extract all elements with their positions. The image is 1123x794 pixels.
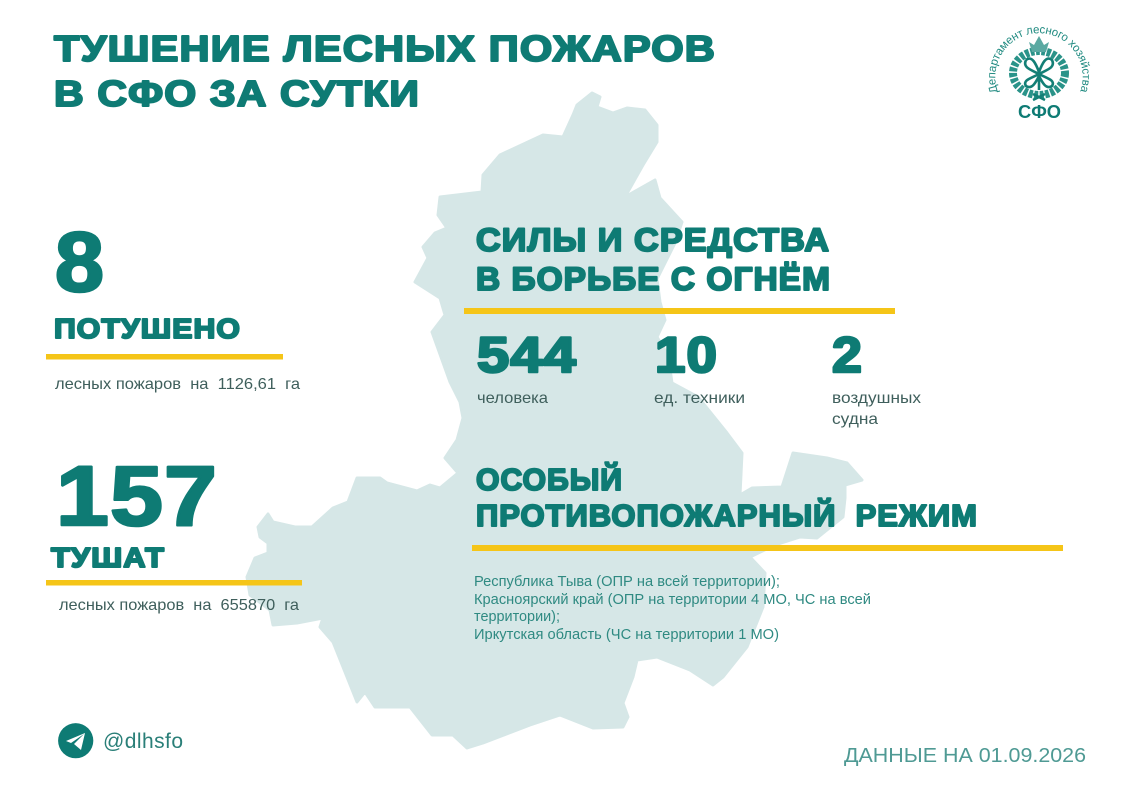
stat: aircraft: 2 [832, 327, 863, 383]
logo: forestry department SFO: Департамент лесного хозяйства [988, 27, 1090, 92]
stat: being fought [46, 449, 302, 614]
stat: extinguished: 8 [55, 215, 105, 309]
list of regions: Республика Тыва (ОПР на всей территории); [474, 573, 780, 590]
stat: aircraft: судна [832, 411, 878, 428]
stat: people: человека [477, 390, 548, 407]
stat: being fought: ТУШАТ [51, 542, 165, 573]
heading: special fire regime [472, 461, 1063, 551]
title: ТУШЕНИЕ ЛЕСНЫХ ПОЖАРОВ [54, 28, 716, 69]
heading: forces and resources: СИЛЫ И СРЕДСТВА [476, 222, 830, 258]
stat: extinguished: ПОТУШЕНО [54, 313, 241, 344]
heading: special fire regime: ПРОТИВОПОЖАРНЫЙ РЕЖИМ [476, 497, 978, 533]
heading: forces and resources: В БОРЬБЕ С ОГНЁМ [476, 261, 831, 297]
logo: forestry department SFO: СФО [1018, 102, 1061, 122]
stat: people: 544 [477, 327, 577, 383]
heading: special fire regime: ОСОБЫЙ [476, 461, 623, 497]
stat: vehicles [654, 327, 745, 407]
title [54, 28, 716, 114]
map of Siberian Federal District [247, 93, 862, 748]
stat: vehicles: ед. техники [654, 390, 745, 407]
stat: vehicles: 10 [655, 327, 718, 383]
heading: forces and resources [464, 222, 895, 314]
stat: aircraft: воздушных [832, 390, 921, 407]
list of regions: Красноярский край (ОПР на территории 4 МО, ЧС на всей [474, 591, 871, 608]
data date: ДАННЫЕ НА 01.09.2026 [844, 745, 1086, 767]
stat: being fought: 157 [56, 449, 218, 543]
telegram handle: @dlhsfo [103, 730, 183, 753]
list of regions [474, 573, 871, 643]
telegram handle [58, 723, 183, 758]
list of regions: Иркутская область (ЧС на территории 1 МО) [474, 626, 779, 643]
stat: extinguished [46, 215, 300, 393]
stat: people [477, 327, 577, 407]
logo: forestry department SFO [988, 27, 1090, 122]
stat: being fought: лесных пожаров на 655870 га [59, 597, 299, 614]
title: В СФО ЗА СУТКИ [54, 73, 420, 114]
stat: aircraft [832, 327, 921, 428]
stat: extinguished: лесных пожаров на 1126,61 га [55, 376, 300, 393]
list of regions: территории); [474, 608, 560, 625]
